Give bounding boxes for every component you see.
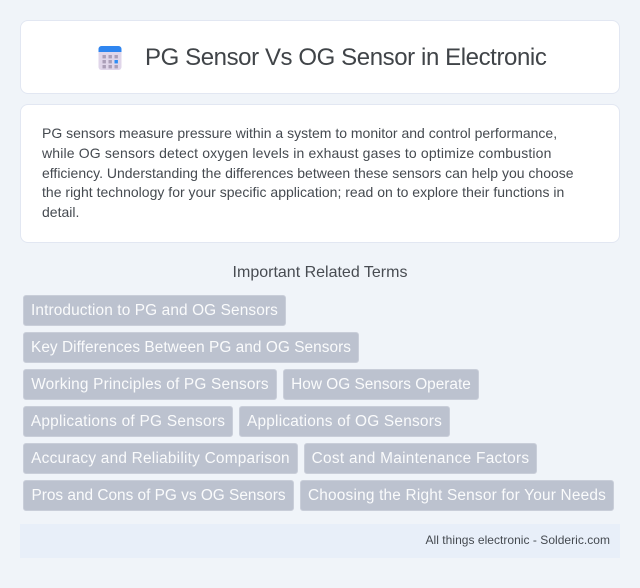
footer: All things electronic - Solderic.com xyxy=(426,533,610,547)
tag: Introduction to PG and OG Sensors xyxy=(31,302,278,319)
tag xyxy=(23,443,298,474)
intro text panel xyxy=(20,104,620,243)
tag xyxy=(23,332,359,363)
related terms tags xyxy=(23,295,614,511)
tag xyxy=(304,443,537,474)
icon: calendar xyxy=(98,46,122,70)
tag: Applications of OG Sensors xyxy=(247,413,442,430)
intro text panel: detail. xyxy=(42,204,79,220)
tag: Working Principles of PG Sensors xyxy=(31,376,269,393)
tag xyxy=(283,369,479,400)
tag xyxy=(239,406,450,437)
title: PG Sensor Vs OG Sensor in Electronic xyxy=(145,44,546,71)
tag xyxy=(23,406,233,437)
intro text panel: efficiency. Understanding the differences between these sensors can help you choose xyxy=(42,165,574,181)
tag: Applications of PG Sensors xyxy=(31,413,225,430)
intro text panel: while OG sensors detect oxygen levels in exhaust gases to optimize combustion xyxy=(42,145,552,161)
intro text panel: PG sensors measure pressure within a system to monitor and control performance, xyxy=(42,125,557,141)
tag: Accuracy and Reliability Comparison xyxy=(31,450,290,467)
tag: Choosing the Right Sensor for Your Needs xyxy=(308,487,606,504)
tag: Pros and Cons of PG vs OG Sensors xyxy=(31,487,286,504)
section heading: Important Related Terms xyxy=(233,264,407,281)
intro text panel: the right technology for your specific application; read on to explore their functions in xyxy=(42,184,564,200)
tag: Key Differences Between PG and OG Sensors xyxy=(31,339,351,356)
header card xyxy=(20,20,620,94)
tag xyxy=(23,369,277,400)
tag: How OG Sensors Operate xyxy=(291,376,471,393)
tag xyxy=(23,295,286,326)
tag xyxy=(23,480,294,511)
footer xyxy=(20,524,620,558)
tag xyxy=(300,480,614,511)
tag: Cost and Maintenance Factors xyxy=(312,450,529,467)
